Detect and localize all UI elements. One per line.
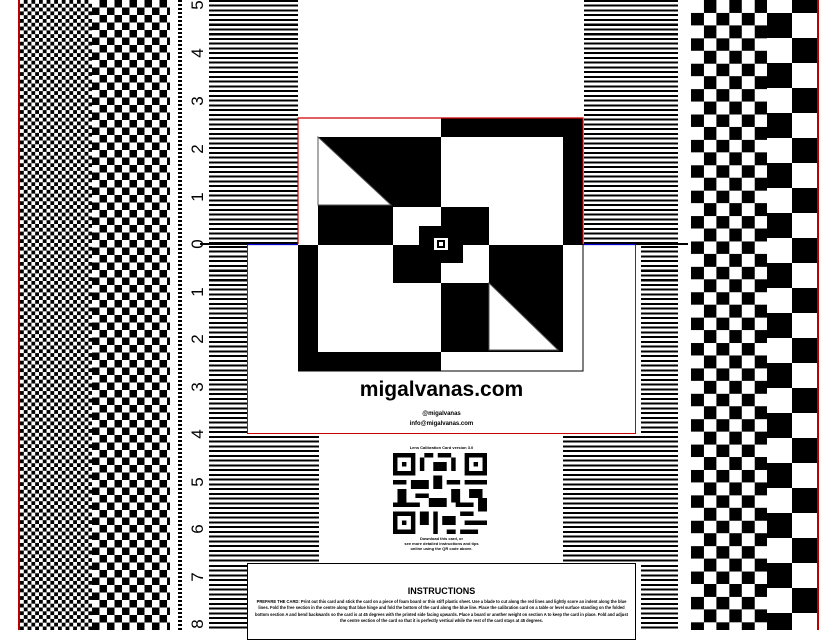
scale numbers: 5 xyxy=(188,477,207,487)
instructions heading: INSTRUCTIONS xyxy=(408,586,475,596)
scale numbers: 2 xyxy=(188,144,207,154)
scale numbers: 3 xyxy=(188,382,207,392)
contact text: info@migalvanas.com xyxy=(410,421,473,427)
zero line xyxy=(200,243,247,245)
right line patterns xyxy=(584,0,678,244)
QR footnote xyxy=(404,536,479,551)
website title: migalvanas.com xyxy=(360,378,523,401)
QR section xyxy=(393,445,487,551)
QR footnote: Download this card, or xyxy=(420,536,463,541)
QR footnote: see more detailed instructions and tips xyxy=(404,541,479,546)
QR code xyxy=(393,453,487,534)
right large checkerboard xyxy=(767,0,817,630)
contact text: @migalvanas xyxy=(422,411,461,417)
scale numbers: 1 xyxy=(188,192,207,202)
left fine checkerboard xyxy=(20,0,92,630)
scale numbers: 1 xyxy=(188,287,207,297)
instructions panel xyxy=(247,563,636,640)
scale numbers: 8 xyxy=(188,619,207,629)
QR caption: Lens Calibration Card version 3.0 xyxy=(410,445,473,450)
right medium checkerboard xyxy=(691,0,767,630)
red fold panel with branding xyxy=(247,245,636,434)
right red cut line xyxy=(817,0,818,630)
scale numbers xyxy=(188,0,207,629)
scale numbers: 4 xyxy=(188,48,207,58)
scale numbers: 0 xyxy=(188,239,207,249)
left red cut line xyxy=(18,0,20,630)
contact text xyxy=(410,410,473,427)
scale numbers: 6 xyxy=(188,524,207,534)
instructions text: PREPARE THE CARD: Print out this card and stick the card on a piece of foam board or thin stiff plastic sheet. Use a blade to cut along the red lines and lightly score an indent along the blue lines. Fold the free section in the centre along that blue hinge and fold the bottom of the card along the blue line. Place the calibration card on a table or level surface standing on the folded bottom section A and bend backwards so the card is at 45 degrees with the printed side facing upwards. Place a board or another weight on section A to keep the card in place. Fold and adjust the centre section of the card so that it is perfectly vertical while the rest of the card stays at 45 degrees. xyxy=(255,599,628,623)
scale numbers: 5 xyxy=(188,0,207,10)
QR footnote: online using the QR code above. xyxy=(410,546,472,551)
scale numbers: 2 xyxy=(188,334,207,344)
left medium checkerboard xyxy=(92,0,170,630)
scale numbers: 7 xyxy=(188,572,207,582)
dotted scale column xyxy=(178,0,182,630)
scale numbers: 4 xyxy=(188,429,207,439)
left line patterns xyxy=(209,0,298,244)
scale numbers: 3 xyxy=(188,96,207,106)
